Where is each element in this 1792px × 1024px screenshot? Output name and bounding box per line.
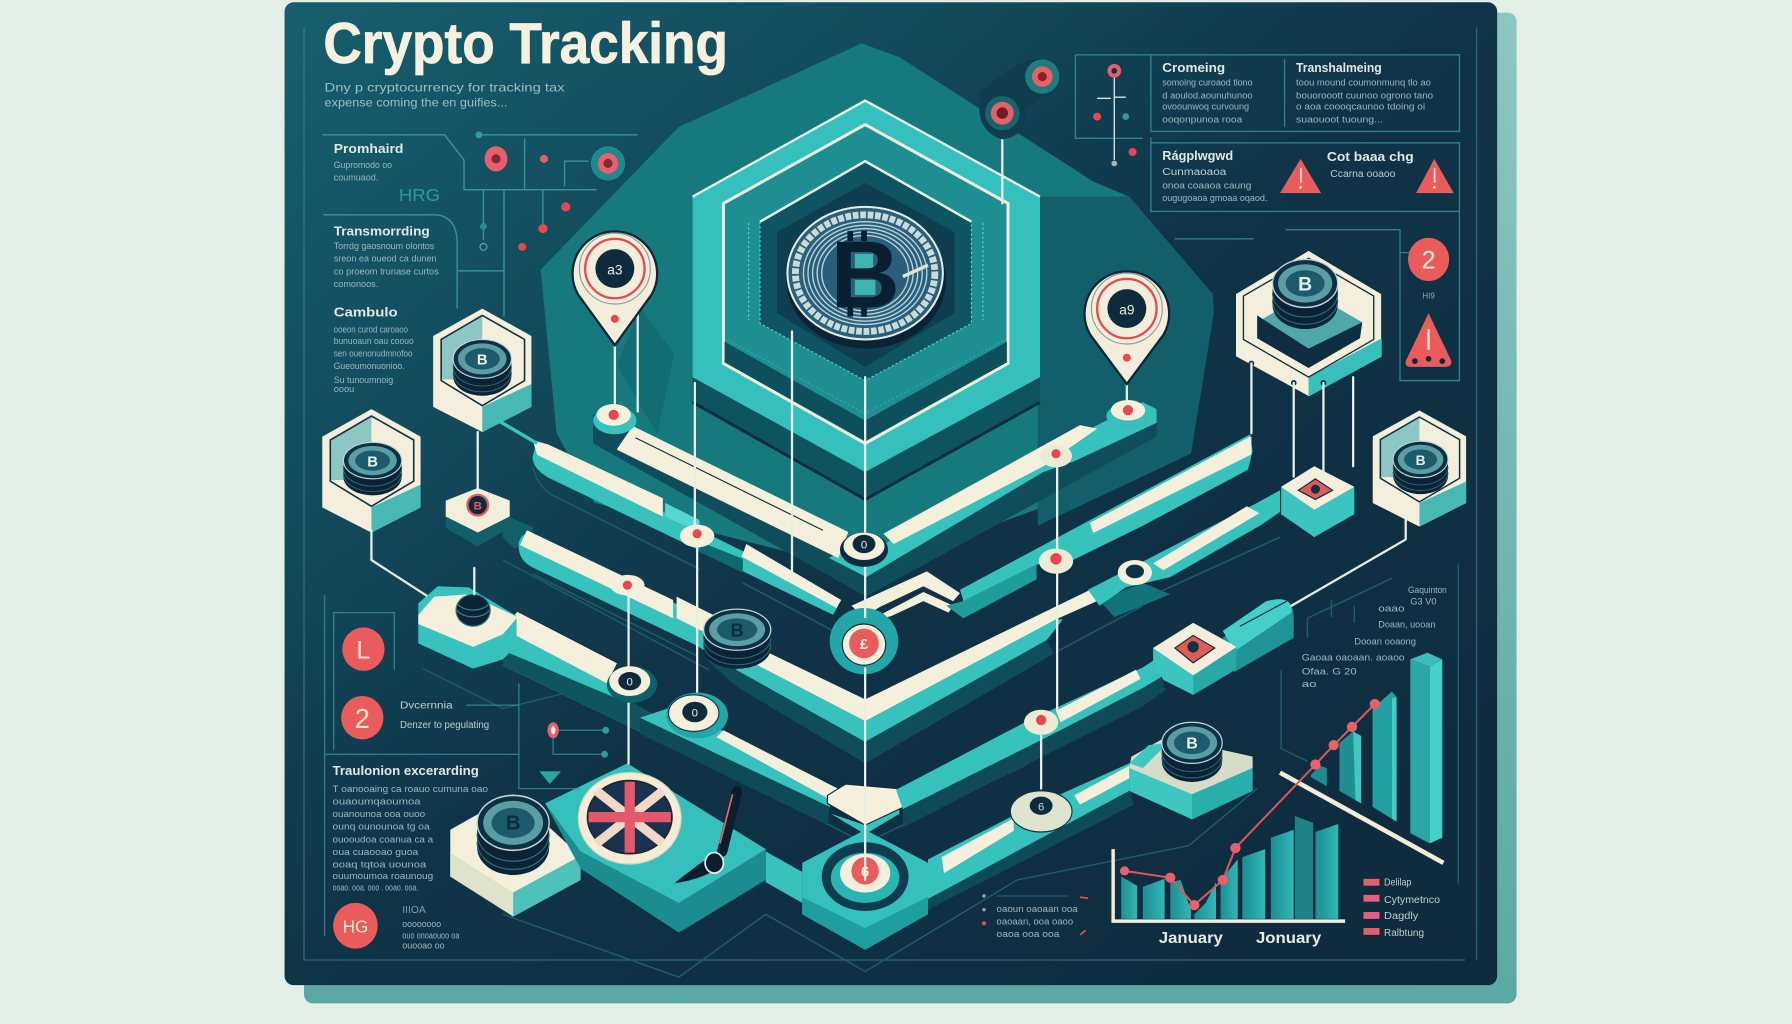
track D joint: [831, 805, 899, 834]
text block: Traulonion excerarding: ounq ounounoa tg oa: [333, 822, 431, 832]
map pin left: [573, 231, 657, 345]
text block: Cromeing: [1162, 61, 1253, 124]
frame lines: [304, 27, 1477, 960]
connector from hexagon to track B: [498, 421, 537, 443]
platform with UK flag: [545, 763, 766, 933]
track node: dark 3: [607, 666, 657, 703]
track D middle: [640, 718, 830, 825]
track B bracket: [851, 571, 960, 617]
track E: [766, 763, 1134, 928]
upper-right chart notes: Doaan, uooan: [1378, 619, 1435, 629]
track A teal strips: [829, 553, 866, 577]
subtitle: Dny p cryptocurrency for tracking tax: [325, 80, 565, 94]
text block: Cambulo: Gueoumonuonioo.: [334, 361, 405, 371]
small hex left node: [446, 488, 510, 546]
upper-right chart notes: [1281, 563, 1458, 883]
text block: Transhalmeing: o aoa coooqcaunoo tdoing oi: [1296, 102, 1425, 112]
upper-right chart notes: G3 V0: [1410, 597, 1437, 607]
text block: Cromeing: d aoulod.aounuhunoo: [1162, 90, 1253, 100]
right lower hexagon node: B: [1416, 453, 1426, 468]
right lower hexagon node: [1373, 411, 1466, 527]
top right panel frames: [1075, 55, 1459, 381]
text block: Cromeing: ooqonpunoa rooa: [1162, 114, 1243, 124]
track node: dark 4: 0: [692, 708, 698, 720]
map pin left: a3: [607, 262, 623, 277]
track node: dark 4: [666, 693, 728, 738]
platform with coin: B: [506, 812, 521, 835]
badge HG: [333, 903, 378, 949]
track C teal left: [519, 531, 731, 669]
track B teal right: [946, 565, 1037, 618]
number badge L: [342, 627, 385, 671]
track C left connector: [503, 514, 533, 549]
text block: Cambulo: Su tunoumnoig: [334, 375, 393, 385]
left lower hexagon node: B: [367, 454, 378, 470]
centre ring node: £: [860, 637, 869, 653]
middle band: [723, 125, 1008, 443]
text block: Traulonion excerarding: ouanounoa ooa ouoo: [333, 809, 425, 819]
track node: red 3: [1040, 445, 1072, 467]
small hex right node: [1281, 466, 1354, 537]
right hexagon block node: B: [1298, 273, 1312, 295]
coin on track C: [704, 609, 771, 669]
circuit lines top left: [322, 131, 638, 317]
text block: Traulonion excerarding: ooao. ooa. ooo . ooao. ooa.: [333, 882, 418, 892]
track node: red 6: [610, 575, 645, 595]
main dark panel: [285, 2, 1497, 985]
text block: Transmorrding: co proeom trunase curtos: [334, 266, 439, 276]
text block: Ragplwgwd: onoa coaaoa caung: [1162, 181, 1251, 191]
track node: red 7: [1024, 710, 1058, 735]
text block: Ragplwgwd: Cunmaoaoa: [1162, 167, 1227, 178]
text block: Cambulo: sen ouenonudmnofoo: [334, 349, 413, 359]
outer band: [693, 101, 1040, 472]
number badge 2 right: [1408, 238, 1449, 300]
track B cream left: [533, 440, 663, 517]
track C right end: [1099, 583, 1170, 617]
text block: Traulonion excerarding: ouaoumqaoumoa: [333, 797, 422, 807]
text block: Traulonion excerarding: ouumoumoa roaunoug: [333, 871, 433, 881]
subtitle: [325, 80, 565, 109]
labels beside badge: Dvcernnia: [400, 701, 453, 712]
track A cream: [618, 427, 847, 557]
backdrop polygon: [541, 43, 1214, 571]
text block: Promhaird: Gupromodo oo: [334, 160, 392, 170]
badge caption: ouo onoaouoo oa: [402, 930, 460, 940]
text block: Promhaird: [334, 142, 440, 205]
track C cream main: [746, 590, 1099, 721]
right hexagon block node: [1235, 250, 1382, 397]
subtitle: expense coming the en guifies...: [325, 95, 507, 109]
number badge L: L: [356, 636, 370, 664]
platform with coin: [450, 794, 581, 917]
track node: dark 2: [1118, 560, 1152, 585]
thin track outlines: [503, 537, 1280, 977]
warning triangle 3: [1406, 313, 1451, 367]
upper-right chart notes: oaao: [1378, 603, 1405, 613]
track D left: [503, 640, 654, 731]
text block: Traulonion excerarding: T oanooaing ca roauo cumuna oao: [333, 784, 488, 794]
track D right: [903, 674, 1166, 827]
track B teal left: [533, 448, 841, 615]
small hex left node: B: [474, 501, 482, 513]
text block: Transmorrding: [334, 224, 439, 289]
upper-right chart notes: Dooan ooaong: [1354, 637, 1416, 647]
track C side: [706, 640, 1054, 763]
track C cream left: [520, 530, 673, 618]
connector lines: [371, 137, 1406, 880]
text block: Cambulo: [334, 306, 414, 394]
track node: dark 5: 6: [1038, 801, 1044, 813]
text block: Transhalmeing: suaouoot tuoung...: [1296, 114, 1383, 124]
track A underside: [593, 414, 1157, 597]
text block: Transhalmeing: [1296, 61, 1433, 124]
bottom centre hex node: [802, 830, 928, 950]
bottom note text: oaoun oaoaan ooa: [997, 904, 1079, 914]
labels beside badge: [400, 701, 489, 731]
left upper hexagon node: B: [477, 353, 488, 369]
track B: [533, 434, 1253, 631]
track node: dark 1: [840, 533, 888, 567]
text block: Transhalmeing: Transhalmeing: [1296, 61, 1382, 75]
bottom centre hex node: 6: [861, 865, 869, 881]
chart: axis labels: Jonuary: [1256, 930, 1321, 947]
hex node on track D: [1153, 623, 1237, 695]
chart: legend: [1363, 878, 1440, 939]
text block: Cot baaa chg: [1327, 150, 1414, 180]
text block: Promhaird: coumuaod.: [334, 173, 378, 183]
chart: axis labels: [1159, 930, 1321, 947]
text block: Cromeing: ovoounwoq curvoung: [1162, 102, 1249, 112]
text block: Ragplwgwd: Rágplwgwd: [1162, 149, 1233, 163]
small circuit markers: [539, 722, 609, 784]
capsule on track D: [1223, 599, 1294, 672]
text block: Transmorrding: sreon ea oueod ca dunen: [334, 254, 437, 264]
panel drop shadow: [304, 13, 1517, 1003]
badge caption: [402, 905, 460, 951]
text block: Ragplwgwd: [1162, 149, 1267, 203]
chart: legend: Ralbtung: [1384, 928, 1424, 939]
bitcoin coin: B: [830, 221, 900, 328]
number badge 2 left: 2: [355, 703, 370, 734]
text block: Cromeing: Cromeing: [1162, 61, 1225, 75]
badge HG: HG: [343, 917, 368, 937]
text block: Transmorrding: Transmorrding: [334, 224, 430, 238]
chart: legend: Cytymetnco: [1384, 895, 1440, 906]
track node: dark 5: [1010, 791, 1072, 832]
hex platform with coin on track E: [1129, 722, 1253, 819]
track B cream right: [1091, 438, 1250, 531]
central hexagon: [693, 101, 1040, 499]
badge caption: oooooooo: [402, 919, 441, 929]
text block: Traulonion excerarding: oua cuaooao guoa: [333, 847, 419, 857]
chart: trend line: [1120, 699, 1380, 910]
track C: [503, 490, 1280, 763]
upper-right chart notes: Ofaa. G 20: [1302, 666, 1357, 676]
text block: Transmorrding: Torrdg gaosnoum olontos: [334, 241, 435, 251]
chart: legend: Delilap: [1384, 878, 1412, 889]
map pin right: a9: [1119, 302, 1134, 317]
large left node: [418, 586, 518, 669]
warning triangle 2: [1416, 159, 1454, 193]
chart: legend: Dagdly: [1384, 911, 1419, 922]
bottom-left panel frames: [325, 595, 606, 936]
track node: red 1: [593, 404, 637, 434]
top right pin lines: [1093, 64, 1137, 166]
chart: column bars: [1121, 816, 1338, 919]
track C teal main: [736, 619, 1063, 742]
centre ring node: [830, 608, 898, 674]
left upper hexagon node: [433, 309, 531, 432]
text block: Transhalmeing: bouorooott cuunoo ogrono tano: [1296, 90, 1433, 100]
upper-right chart notes: Gaoaa oaoaan. aoaoo: [1302, 653, 1405, 663]
text block: Transhalmeing: toou mound coumonmunq tlo ao: [1296, 78, 1431, 88]
bottom note text: [982, 894, 1088, 939]
chart: axis: [1113, 849, 1345, 921]
title: Crypto Tracking: [323, 12, 728, 76]
hexagon extrusion: [693, 377, 1040, 499]
track node: dark 1: 0: [861, 540, 867, 552]
text block: Traulonion excerarding: ooaq tqtoa uounoa: [333, 859, 427, 869]
badge caption: ouooao oo: [402, 941, 445, 951]
track node: red 5: [1039, 549, 1073, 574]
bottom note text: oaoa ooa ooa: [997, 929, 1060, 939]
coin on track C: B: [731, 620, 744, 641]
track node: dark 3: 0: [627, 677, 633, 689]
text block: Transmorrding: comonoos.: [334, 279, 378, 289]
warning triangle 1: [1280, 159, 1321, 193]
text block: Traulonion excerarding: ouooudoa coanua ca a: [333, 834, 434, 844]
track A: [593, 402, 1157, 597]
text block: Traulonion excerarding: [333, 764, 488, 892]
text block: Cambulo: bunuoaun oau coouo: [334, 336, 414, 346]
text block: Ragplwgwd: ougugoaoa gmoaa oqaod.: [1162, 193, 1267, 203]
upper-right chart notes: Gaquinton: [1408, 585, 1447, 595]
text block: Traulonion excerarding: Traulonion excerarding: [333, 764, 479, 778]
top pin cluster: [979, 59, 1061, 139]
flag medallion: [578, 773, 681, 864]
track D: [423, 611, 1166, 843]
red ring dots: [485, 146, 625, 251]
text block: Cromeing: somoing curoaod tlono: [1162, 78, 1253, 88]
upper-right chart notes: ao: [1302, 679, 1317, 689]
inner plate: [760, 161, 971, 381]
labels beside badge: Denzer to pegulating: [400, 720, 489, 731]
chart: isometric tall bars: [1311, 653, 1442, 843]
inner lower dark: [725, 342, 1007, 441]
hex platform with coin on track E: B: [1186, 736, 1198, 753]
text block: Cot baaa chg: Cot baaa chg: [1327, 150, 1414, 164]
bottom note text: oaoaan, ooa oaoo: [997, 917, 1073, 927]
pen icon: [674, 791, 737, 883]
track node: red 2: [1106, 400, 1150, 429]
number badge 2 right: HI9: [1422, 291, 1435, 300]
bitcoin coin: [786, 207, 946, 349]
text block: Cambulo: Cambulo: [334, 306, 398, 320]
text block: Cambulo: ooou: [334, 384, 354, 394]
text block: Promhaird: Promhaird: [334, 142, 403, 156]
left lower hexagon node: [322, 409, 421, 533]
chart: diagonal axis: [1280, 773, 1443, 863]
text block: Promhaird: HRG: [399, 185, 440, 205]
text block: Cambulo: ooeon curod caroaoo: [334, 325, 408, 335]
number badge 2 left: [341, 696, 383, 739]
number badge 2 right: 2: [1422, 247, 1436, 275]
text block: Cot baaa chg: Ccarna ooaoo: [1330, 169, 1396, 180]
track node: red 4: [680, 525, 714, 547]
chart: axis labels: January: [1159, 930, 1223, 947]
map pin right: [1085, 271, 1169, 384]
badge caption: IIIOA: [402, 905, 426, 916]
